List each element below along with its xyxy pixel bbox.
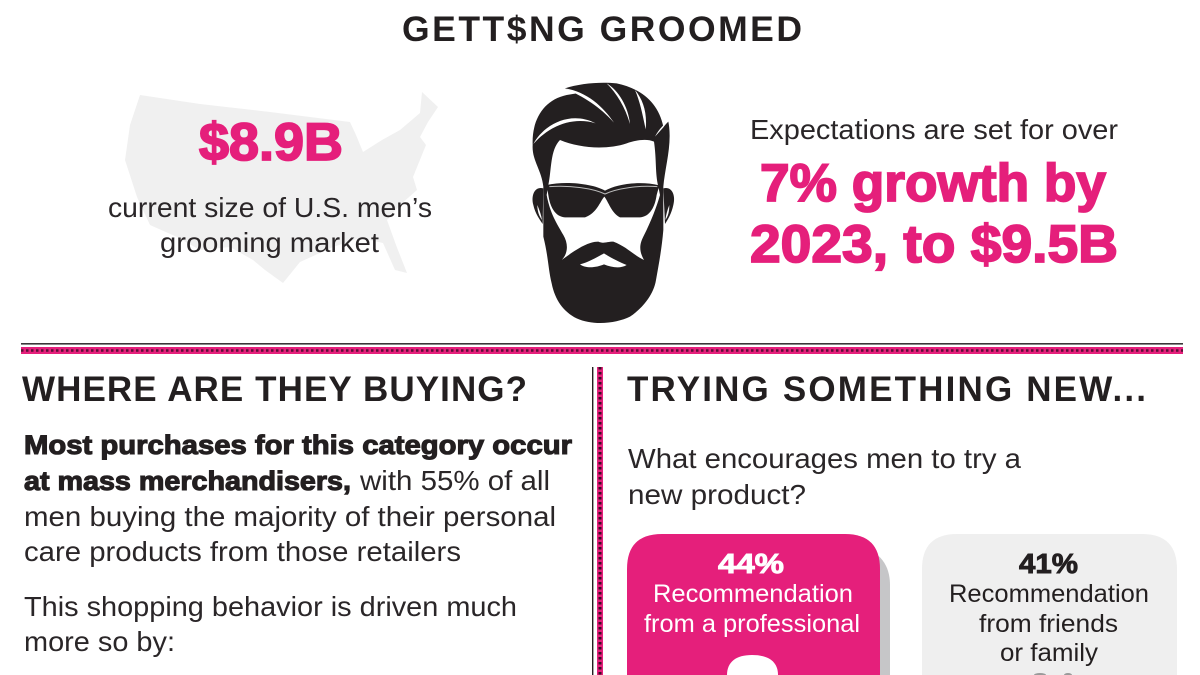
text block: purchases: men buying the majority of their personal — [24, 501, 556, 532]
text: market description — [108, 192, 432, 258]
card: recommendation from friends or family: Recommendation — [949, 580, 1149, 608]
icon: people heads — [1034, 673, 1072, 675]
text: expectations: Expectations are set for over — [750, 114, 1118, 145]
card: recommendation from a professional: Recommendation — [653, 580, 853, 608]
card: recommendation from friends or family — [922, 534, 1177, 675]
text block: purchases: Most purchases for this category occur — [24, 430, 573, 460]
panel: growth forecast — [750, 114, 1118, 274]
stat: 7% growth by 2023: 2023, to $9.5B — [750, 215, 1118, 274]
text block: shopping behavior — [24, 591, 517, 657]
text: question: What encourages men to try a — [628, 443, 1022, 474]
text: question: new product? — [628, 479, 806, 510]
card: recommendation from friends or family: from friends — [979, 610, 1118, 638]
text: market description: grooming market — [160, 227, 379, 258]
text block: purchases: at mass merchandisers, — [24, 466, 351, 496]
card: recommendation from a professional — [627, 534, 890, 675]
stat: 7% growth by 2023 — [750, 154, 1118, 274]
icon: bearded man with sunglasses — [533, 83, 674, 323]
icon: person head — [727, 655, 778, 675]
text block: purchases — [24, 430, 573, 567]
heading: WHERE ARE THEY BUYING? — [22, 370, 527, 409]
text block: purchases: care products from those retailers — [24, 536, 461, 567]
card: recommendation from a professional: 44% — [718, 548, 784, 579]
heading: TRYING SOMETHING NEW... — [627, 370, 1146, 409]
card: recommendation from friends or family: or family — [1000, 639, 1099, 667]
text: question — [628, 443, 1022, 510]
text: market description: current size of U.S. men’s — [108, 192, 432, 223]
stat: 7% growth by 2023: 7% growth by — [760, 154, 1107, 213]
panel: where are they buying — [22, 370, 573, 657]
text block: purchases: with 55% of all — [359, 465, 550, 496]
text block: shopping behavior: more so by: — [24, 626, 175, 657]
panel: market size — [108, 92, 438, 283]
title: GETT$NG GROOMED — [402, 9, 802, 49]
panel: trying something new — [627, 370, 1177, 675]
text block: shopping behavior: This shopping behavior is driven much — [24, 591, 517, 622]
card: recommendation from friends or family: 41% — [1019, 548, 1078, 579]
card: recommendation from a professional: from a professional — [644, 610, 860, 638]
icon: U.S. map — [125, 92, 438, 283]
stat: $8.9B: $8.9B — [199, 113, 343, 172]
